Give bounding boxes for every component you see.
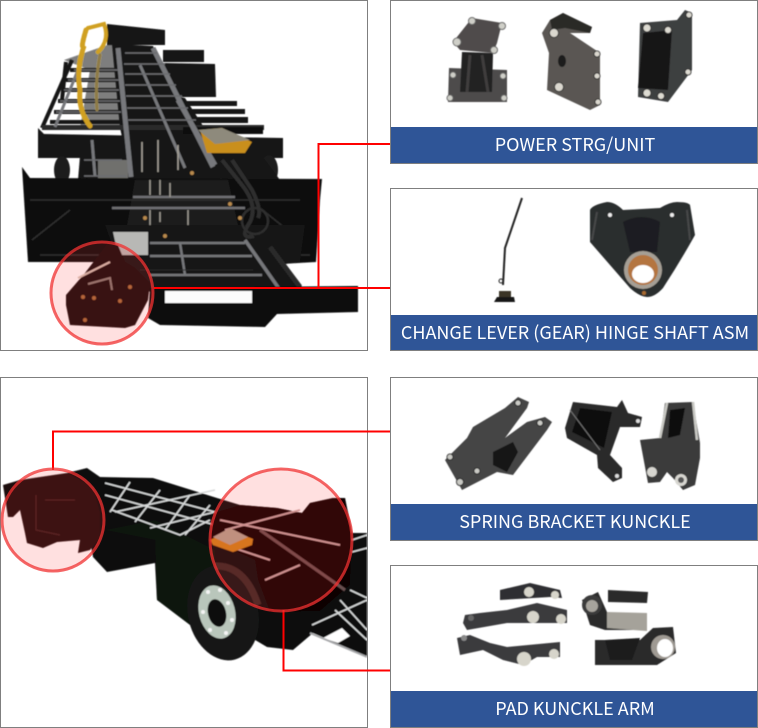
label: spring bracket: SPRING BRACKET KUNCKLE bbox=[459, 508, 691, 534]
parts: spring brackets bbox=[445, 397, 700, 490]
hoses bbox=[222, 160, 268, 237]
rear wide panel bbox=[22, 167, 322, 264]
cross panel bbox=[38, 128, 283, 158]
highlight circle: steering unit bbox=[51, 242, 153, 344]
orange box bbox=[210, 536, 254, 553]
label: pad knuckle arm bbox=[391, 691, 757, 727]
chassis photo: side view bbox=[3, 468, 367, 668]
highlight circle: knuckle area bbox=[210, 469, 352, 611]
grey metal plate bbox=[113, 232, 148, 255]
bracket three bbox=[638, 10, 692, 102]
knuckle arm one bbox=[500, 583, 562, 600]
parts: change lever and hinge shaft bbox=[494, 198, 695, 302]
wheel bbox=[187, 566, 259, 662]
white gap bbox=[323, 628, 350, 643]
lower frame bbox=[148, 286, 358, 327]
callout line: power strg bbox=[318, 144, 390, 288]
callout line: pad knuckle arm bbox=[284, 610, 390, 670]
label: power strg unit: POWER STRG/UNIT bbox=[495, 131, 655, 157]
frame silhouette bbox=[67, 468, 367, 657]
chassis photo: rear view bbox=[22, 24, 358, 328]
gear lever bbox=[494, 198, 522, 302]
bolts bbox=[143, 171, 242, 238]
right unit in circle bbox=[210, 498, 352, 612]
side panel bbox=[105, 520, 215, 625]
parts: knuckle arms and pads bbox=[457, 583, 676, 666]
panel: spring bracket bbox=[390, 377, 758, 541]
spring bracket two bbox=[565, 400, 642, 482]
centre ladder bbox=[112, 44, 213, 177]
panel: pad knuckle arm bbox=[390, 565, 758, 728]
rails bbox=[55, 48, 215, 177]
label: change lever: CHANGE LEVER (GEAR) HINGE SHAFT ASM bbox=[401, 318, 749, 344]
pad with ring bbox=[595, 627, 676, 665]
pad top bbox=[608, 590, 648, 603]
pad with plate bbox=[582, 592, 647, 631]
central lower dark block bbox=[105, 225, 305, 292]
callout line: spring bracket bbox=[53, 432, 390, 470]
pipes bbox=[142, 140, 188, 225]
spring bracket one bbox=[445, 397, 552, 490]
knuckle arm two bbox=[463, 603, 567, 630]
bracket two bbox=[542, 13, 601, 110]
left ladder bbox=[42, 60, 120, 128]
label: spring bracket bbox=[391, 504, 757, 540]
top block bbox=[107, 24, 165, 45]
knuckle arm three bbox=[457, 635, 560, 666]
bracket one bbox=[447, 18, 507, 102]
parts: power strg unit bbox=[447, 10, 692, 110]
yellow cable coil bbox=[79, 24, 106, 126]
highlight circle: front spring bbox=[2, 469, 104, 571]
label: pad knuckle arm: PAD KUNCKLE ARM bbox=[495, 695, 655, 721]
left unit in circle bbox=[3, 473, 100, 553]
right side boxes bbox=[163, 50, 248, 123]
panel: side view chassis photo bbox=[0, 377, 368, 728]
hinge bracket bbox=[590, 202, 695, 297]
yellow battery box bbox=[200, 128, 252, 153]
panel: power strg unit bbox=[390, 0, 758, 164]
tyres and lower side dark bbox=[54, 156, 70, 184]
lower ladder bbox=[150, 240, 280, 290]
spring bracket three bbox=[640, 402, 700, 490]
frame grid lines bbox=[105, 482, 367, 640]
label: power strg unit bbox=[391, 127, 757, 163]
steering unit in circle bbox=[66, 243, 150, 328]
panel: change lever hinge shaft bbox=[390, 188, 758, 351]
panel: rear view chassis photo bbox=[0, 0, 368, 351]
callout line: change lever bbox=[154, 287, 390, 289]
